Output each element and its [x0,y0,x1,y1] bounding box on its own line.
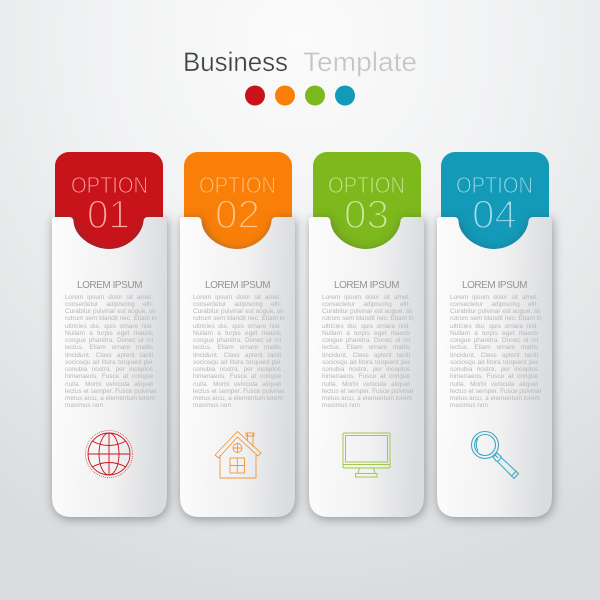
text block: ultricies dui, quis ornare nisl. [193,322,281,330]
text block: conubia nostra, per inceptos [65,366,153,373]
text block: lectus. Etiam ornare mattis [65,344,153,351]
text block: ultricies dui, quis ornare nisl. [65,322,153,330]
colour dots [245,86,355,106]
text block: Lorem ipsum dolor sit amet, [193,294,281,300]
text block: Curabitur pulvinar est augue, sit [65,308,155,315]
text block: maximus non [65,402,103,409]
text block: Curabitur pulvinar est augue, sit [322,308,412,315]
text block [193,294,285,409]
title [183,47,417,77]
text block: himenaeos. Fusce at congue [65,373,153,380]
text block: Nullam a turpis eget mauris [450,330,538,337]
text block: congue pharetra. Donec ut mi [322,337,410,344]
text block [65,294,157,409]
text block: consectetur adipiscing elit. [193,301,281,308]
panel: option 02: 02 [215,193,260,237]
text block: sociosqu ad litora torquent per [65,359,153,366]
title: Template [303,47,417,77]
text block: metus arcu, a elementum lorem [193,395,283,402]
icon: globe [86,430,132,478]
panel: option 02 [174,152,303,526]
text block: rutrum sem blandit nec. Etiam in [193,315,285,322]
heading: LOREM IPSUM [205,280,270,290]
panel: option 04: 04 [472,193,517,237]
text block: metus arcu, a elementum lorem [450,395,540,402]
text block: Nullam a turpis eget mauris [193,330,281,337]
title: Business [183,47,288,77]
text block: himenaeos. Fusce at congue [322,373,410,380]
text block [322,294,414,409]
text block: Lorem ipsum dolor sit amet, [322,294,410,300]
text block: lectus. Etiam ornare mattis [450,344,538,351]
text block: rutrum sem blandit nec. Etiam in [322,315,414,322]
text block: Lorem ipsum dolor sit amet, [65,294,153,300]
text block: Nullam a turpis eget mauris [322,330,410,337]
text block: conubia nostra, per inceptos [193,366,281,373]
text block: consectetur adipiscing elit. [450,301,538,308]
heading: LOREM IPSUM [334,280,399,290]
text block: metus arcu, a elementum lorem [322,395,412,402]
text block: himenaeos. Fusce at congue [193,373,281,380]
heading: LOREM IPSUM [462,280,527,290]
text block: rutrum sem blandit nec. Etiam in [450,315,542,322]
panel: option 04: OPTION [456,172,533,198]
text block: tincidunt. Class aptent taciti [450,352,538,358]
text block: congue pharetra. Donec ut mi [450,337,538,344]
text block: conubia nostra, per inceptos [450,366,538,373]
panel: option 01: OPTION [71,172,148,198]
panel: option 01 [46,152,175,526]
text block: lectus et semper. Fusce pulvinar [193,388,285,395]
text block: tincidunt. Class aptent taciti [65,352,153,358]
text block: Nullam a turpis eget mauris [65,330,153,337]
text block: nulla. Morbi vehicula aliquet [450,380,538,388]
text block: lectus et semper. Fusce pulvinar [65,388,157,395]
text block: ultricies dui, quis ornare nisl. [450,322,538,330]
text block: Lorem ipsum dolor sit amet, [450,294,538,300]
text block: Curabitur pulvinar est augue, sit [450,308,540,315]
text block: nulla. Morbi vehicula aliquet [322,380,410,388]
text block: maximus non [322,402,360,409]
text block [450,294,542,409]
text block: lectus et semper. Fusce pulvinar [450,388,542,395]
text block: lectus. Etiam ornare mattis [193,344,281,351]
text block: sociosqu ad litora torquent per [193,359,281,366]
text block: rutrum sem blandit nec. Etiam in [65,315,157,322]
text block: congue pharetra. Donec ut mi [193,337,281,344]
text block: conubia nostra, per inceptos [322,366,410,373]
text block: ultricies dui, quis ornare nisl. [322,322,410,330]
text block: maximus non [450,402,488,409]
panel: option 04 [432,152,560,526]
icon: magnifying glass [472,432,518,478]
text block: lectus. Etiam ornare mattis [322,344,410,351]
panel: option 03: OPTION [328,172,405,198]
text block: sociosqu ad litora torquent per [322,359,410,366]
text block: Curabitur pulvinar est augue, sit [193,308,283,315]
icon: monitor [343,433,390,477]
text block: nulla. Morbi vehicula aliquet [65,380,153,388]
text block: sociosqu ad litora torquent per [450,359,538,366]
text block: maximus non [193,402,231,409]
text block: himenaeos. Fusce at congue [450,373,538,380]
text block: metus arcu, a elementum lorem [65,395,155,402]
panel: option 02: OPTION [199,172,276,198]
text block: consectetur adipiscing elit. [322,301,410,308]
text block: congue pharetra. Donec ut mi [65,337,153,344]
panel: option 01: 01 [87,193,130,237]
text block: tincidunt. Class aptent taciti [193,352,281,358]
panel: option 03 [303,152,432,526]
text block: consectetur adipiscing elit. [65,301,153,308]
heading: LOREM IPSUM [77,280,142,290]
text block: tincidunt. Class aptent taciti [322,352,410,358]
text block: lectus et semper. Fusce pulvinar [322,388,414,395]
panel: option 03: 03 [344,193,389,237]
icon: house [215,432,261,478]
text block: nulla. Morbi vehicula aliquet [193,380,281,388]
